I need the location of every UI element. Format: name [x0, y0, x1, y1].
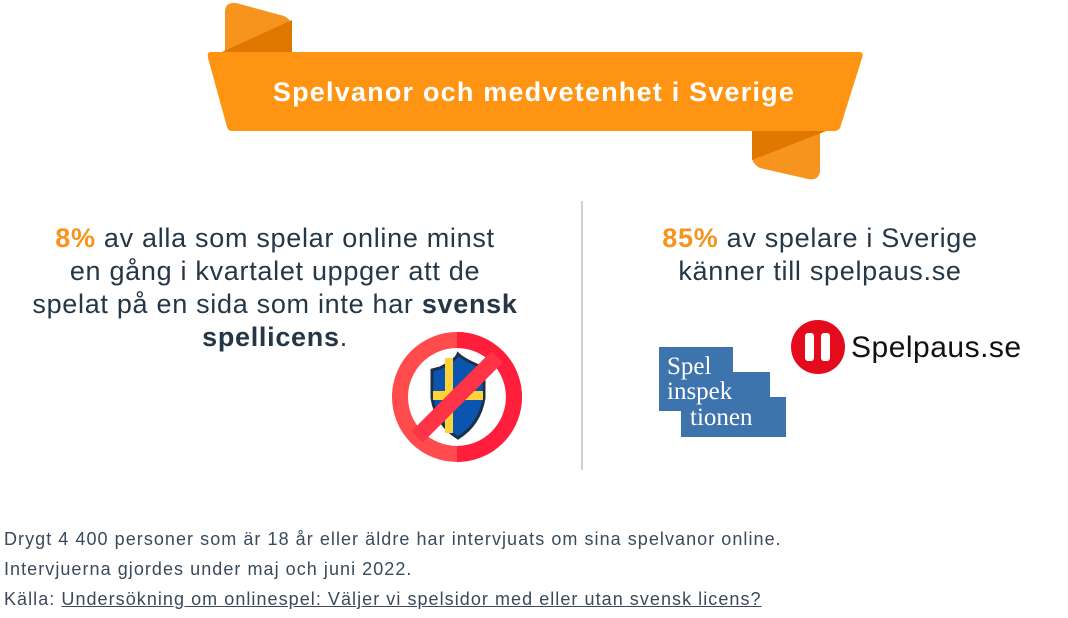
right stat text	[662, 223, 978, 286]
footer text: Källa: Undersökning om onlinespel: Väljer vi spelsidor med eller utan svensk licens?	[4, 589, 762, 609]
footer text: Drygt 4 400 personer som är 18 år eller äldre har intervjuats om sina spelvanor online.	[4, 529, 782, 549]
logo: Spelinspektionen: inspek	[667, 378, 733, 405]
title ribbon: Spelvanor och medvetenhet i Sverige	[273, 77, 795, 107]
title ribbon	[208, 2, 863, 180]
icon: forbidden swedish shield	[392, 332, 522, 462]
left stat text: 8% av alla som spelar online minst	[55, 223, 495, 253]
right stat text: känner till spelpaus.se	[678, 256, 962, 286]
left stat text: spelat på en sida som inte har svensk	[32, 289, 518, 319]
logo: Spelinspektionen: tionen	[690, 404, 753, 431]
footer text: Intervjuerna gjordes under maj och juni 2022.	[4, 559, 412, 579]
logo: Spelinspektionen	[659, 347, 786, 437]
right stat text: 85% av spelare i Sverige	[662, 223, 978, 253]
logo: Spelinspektionen: Spel	[667, 353, 712, 380]
footer text	[4, 529, 782, 609]
divider	[581, 201, 583, 470]
left stat text: en gång i kvartalet uppger att de	[70, 256, 480, 286]
logo: Spelpaus.se: Spelpaus.se	[851, 331, 1022, 364]
left stat text: spellicens.	[202, 322, 348, 352]
logo: Spelpaus.se	[791, 320, 1022, 374]
left stat text	[32, 223, 518, 352]
